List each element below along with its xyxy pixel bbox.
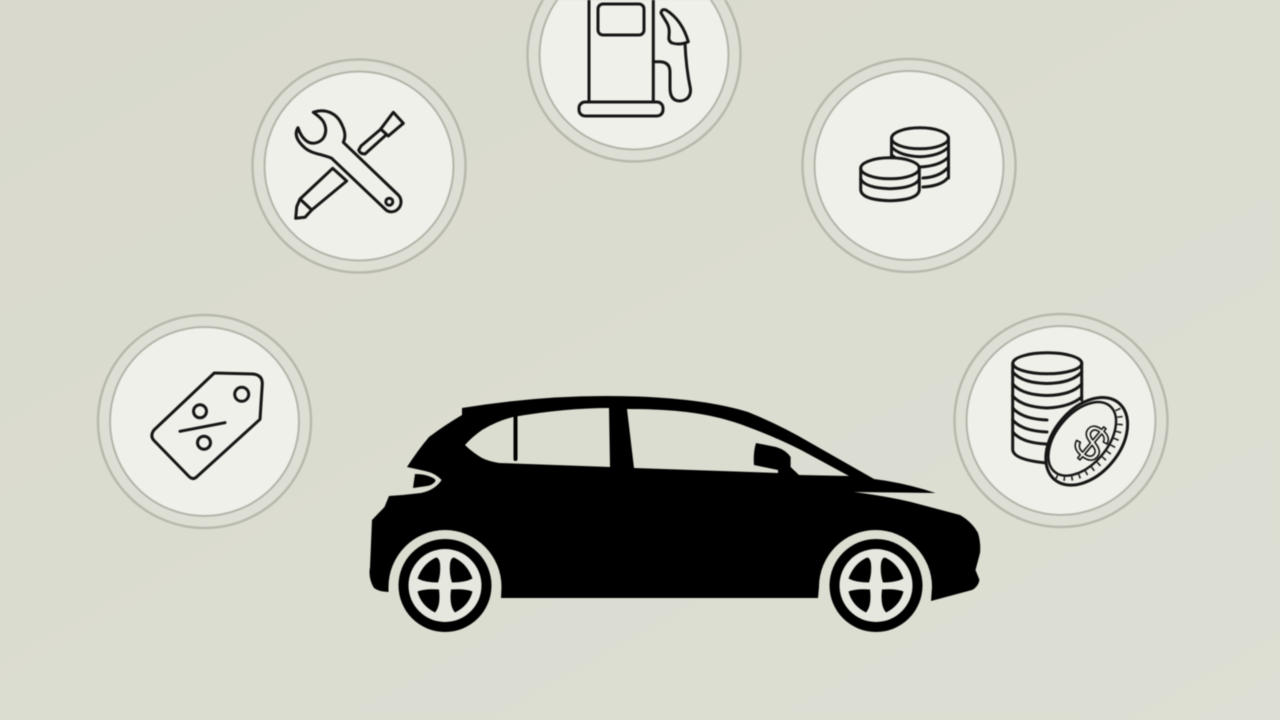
rear wheel xyxy=(398,539,492,632)
icon: screwdriver handle xyxy=(296,168,347,218)
tail light xyxy=(413,474,436,488)
icon: price tag xyxy=(152,373,262,479)
icon circle: price tag with percent xyxy=(98,315,311,528)
icon circle: fuel pump xyxy=(528,0,740,162)
icon: front coin stack xyxy=(861,158,919,201)
icon circle: wrench and screwdriver xyxy=(252,60,466,272)
icon circle: coin stack with dollar coin xyxy=(954,314,1168,527)
icon: tall coin stack xyxy=(1013,353,1082,463)
car silhouette xyxy=(370,396,980,632)
icon: screwdriver tip xyxy=(359,112,403,154)
icon: dollar coin xyxy=(1029,382,1144,501)
icon circle: two coin stacks xyxy=(802,59,1016,272)
icon: fuel pump xyxy=(579,0,691,116)
front wheel xyxy=(830,539,922,632)
icon: wrench xyxy=(296,111,401,212)
rear window pillar xyxy=(514,414,518,459)
icon: back coin stack xyxy=(892,128,948,187)
dollar sign: $ xyxy=(1063,413,1120,473)
car body xyxy=(370,396,980,601)
